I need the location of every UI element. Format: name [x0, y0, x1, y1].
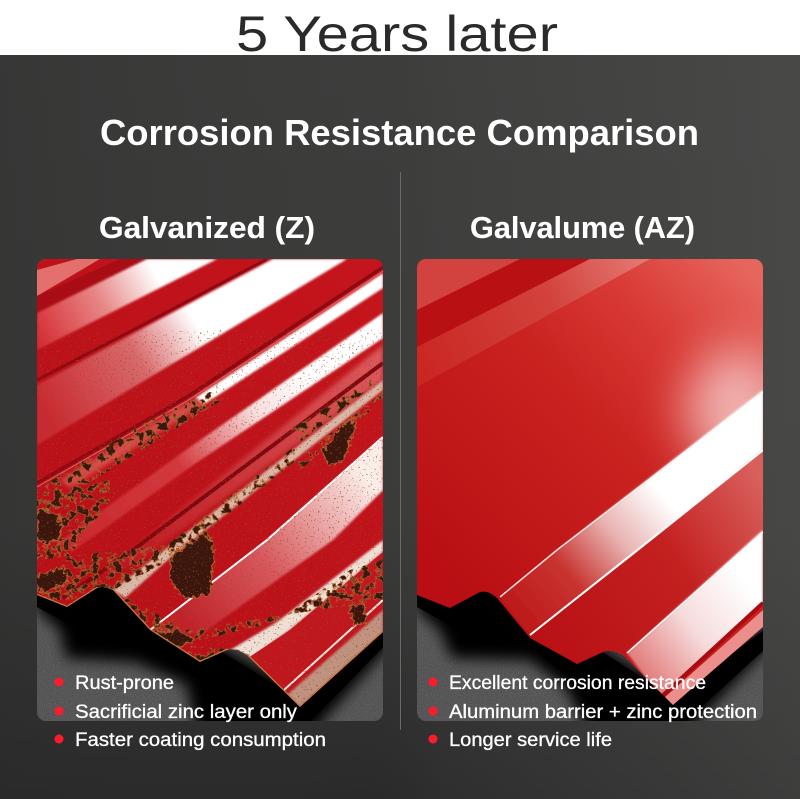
- ridge 2: [227, 540, 383, 662]
- panel: Galvanized (Z): [37, 210, 395, 751]
- pale band: [150, 437, 383, 635]
- lower white highlight: [627, 530, 763, 697]
- rust-worn ridge 1: [113, 380, 383, 598]
- title: 5 Years later: 5 Years later: [236, 6, 558, 62]
- bullet: Aluminum barrier + zinc protection: Aluminum barrier + zinc protection: [449, 702, 757, 723]
- glow: [685, 350, 785, 470]
- orange rim along the cut edge: [37, 588, 383, 707]
- pale edge strip: [664, 610, 763, 705]
- edge strip: [287, 610, 383, 707]
- bullet list: Galvalume: [428, 673, 757, 751]
- highlight band 3: [195, 273, 383, 405]
- column heading: Galvanized (Z): Galvanized (Z): [99, 210, 315, 245]
- lighter band with dots: [100, 345, 383, 575]
- red band: [566, 452, 763, 664]
- corrugated sheet: [417, 259, 785, 721]
- main white highlight: [500, 390, 763, 635]
- dark red stripe: [660, 603, 763, 698]
- bullet: Sacrificial zinc layer only: Sacrificial zinc layer only: [75, 702, 298, 723]
- top white title band: [0, 0, 800, 62]
- photo: rusted corrugated red sheet: [37, 259, 395, 735]
- column heading: Galvalume (AZ): Galvalume (AZ): [470, 210, 695, 245]
- lighter strip: [417, 259, 650, 387]
- corrugated sheet: [37, 259, 383, 721]
- highlight band 4: [57, 313, 383, 552]
- grooves: [37, 259, 267, 380]
- shadow under sheet: [37, 607, 383, 721]
- upper-left pale strip: [37, 259, 100, 296]
- fine speckle: [37, 330, 383, 720]
- rust patches: [37, 380, 383, 662]
- center divider line: [400, 172, 401, 730]
- bullet list: Galvanized: [54, 673, 326, 751]
- bullet: Longer service life: Longer service life: [449, 730, 612, 751]
- highlight band 2: [37, 259, 347, 445]
- bullet: Excellent corrosion resistance: Excellent corrosion resistance: [449, 673, 706, 694]
- panel: Galvalume (AZ): [417, 210, 785, 751]
- bullet: Rust-prone: Rust-prone: [75, 673, 174, 694]
- photo: clean corrugated red sheet: [417, 259, 785, 735]
- heading: Corrosion Resistance Comparison: Corrosion Resistance Comparison: [100, 112, 699, 153]
- shadow under sheet: [417, 607, 763, 721]
- top-left lighter strip: [417, 259, 520, 310]
- dark strip: [417, 259, 590, 347]
- bullet: Faster coating consumption: Faster coating consumption: [75, 730, 326, 751]
- highlight band 1: [37, 259, 217, 350]
